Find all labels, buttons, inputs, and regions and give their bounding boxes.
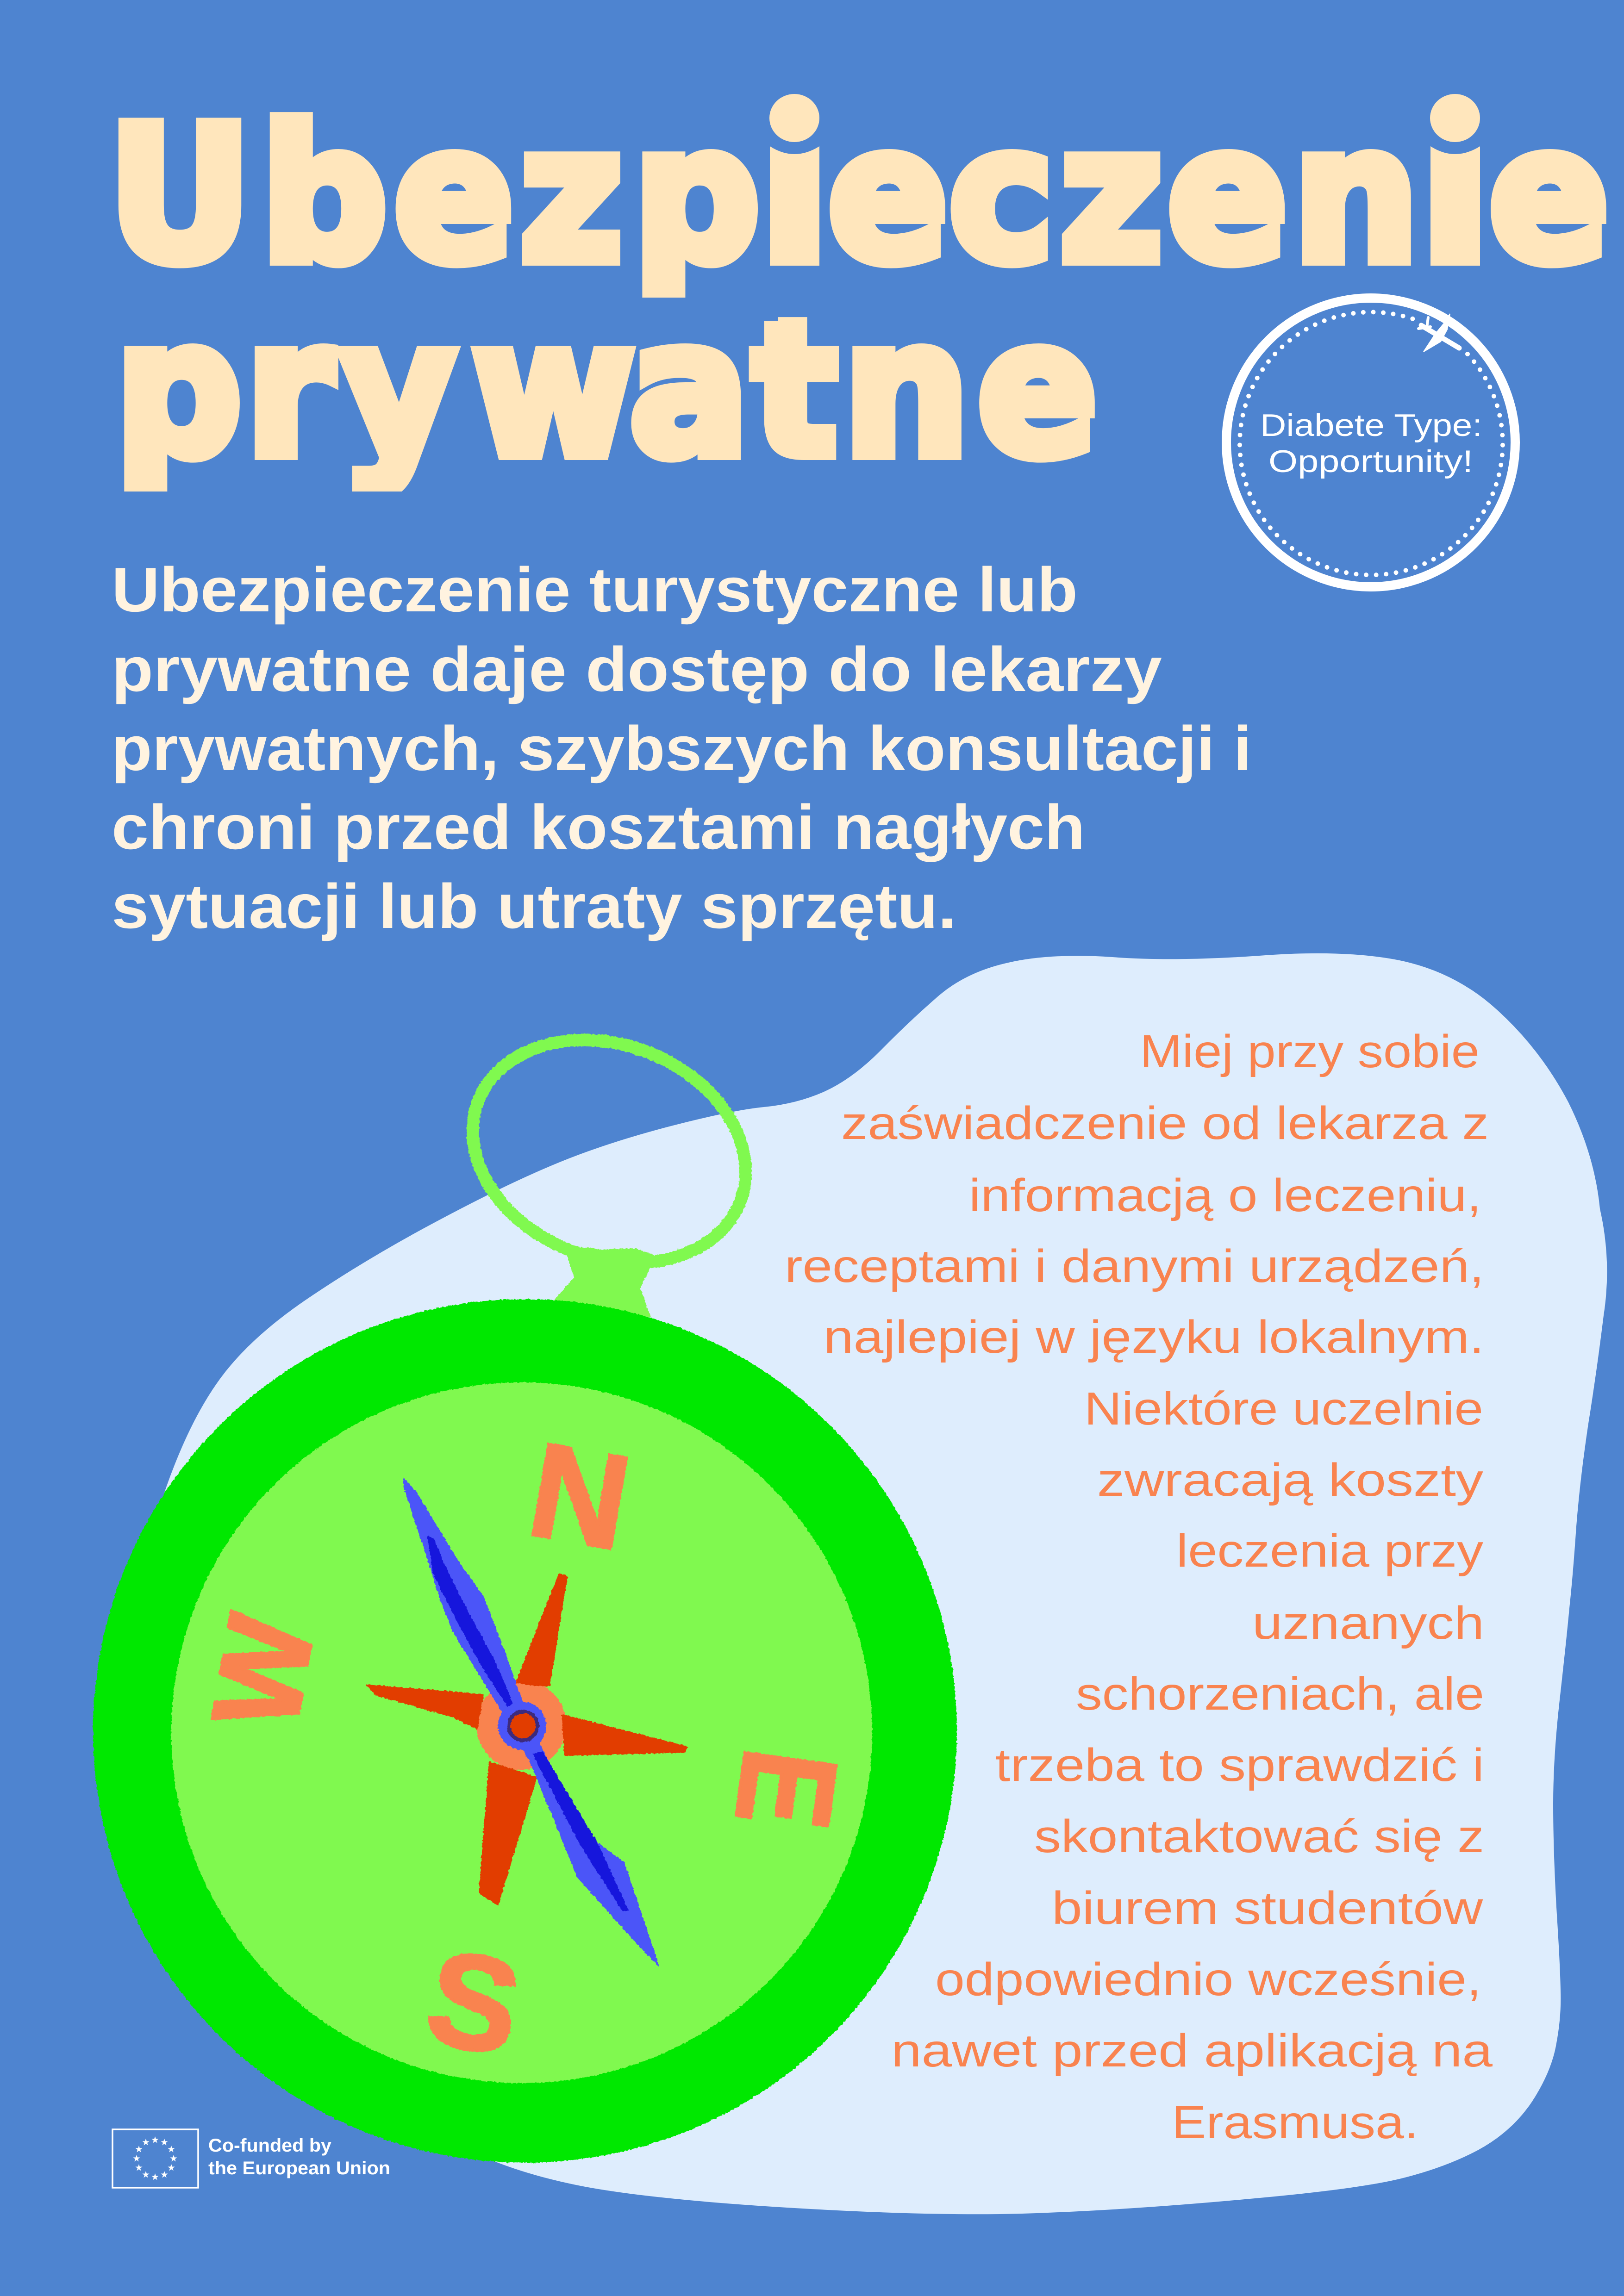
title: Ubezpieczenie	[108, 88, 1609, 303]
EU co-funded logo	[112, 2129, 390, 2188]
panel text: advice: skontaktować się z	[1034, 1811, 1484, 1862]
panel text: advice	[785, 1026, 1493, 2148]
panel text: advice: receptami i danymi urządzeń,	[785, 1240, 1484, 1292]
cardinal letters: S	[417, 1921, 531, 2084]
panel text: advice: informacją o leczeniu,	[969, 1170, 1481, 1221]
panel text: advice: zwracają koszty	[1097, 1454, 1483, 1506]
EU text: the European Union	[208, 2158, 390, 2178]
panel text: advice: najlepiej w języku lokalnym.	[824, 1311, 1484, 1363]
panel text: advice: odpowiednio wcześnie,	[935, 1954, 1481, 2005]
cardinal letters: W	[186, 1605, 340, 1738]
icon: compass	[93, 1002, 957, 2163]
icon: airplane	[1418, 314, 1459, 352]
compass dial	[171, 1382, 872, 2083]
compass outer body	[93, 1299, 957, 2163]
panel text: advice: biurem studentów	[1052, 1882, 1483, 1934]
compass hub	[476, 1680, 566, 1770]
badge: Diabete Type Opportunity	[1226, 298, 1515, 587]
intro text: chroni przed kosztami nagłych	[112, 792, 1085, 862]
intro text	[112, 554, 1252, 941]
badge text: Opportunity!	[1268, 444, 1473, 479]
panel text: advice: trzeba to sprawdzić i	[995, 1739, 1484, 1791]
panel text: advice: Miej przy sobie	[1140, 1026, 1480, 1077]
panel text: advice: Erasmusa.	[1172, 2097, 1418, 2148]
intro text: prywatnych, szybszych konsultacji i	[112, 713, 1252, 784]
cardinal letters: N	[519, 1414, 640, 1579]
intro text: sytuacji lub utraty sprzętu.	[112, 871, 956, 941]
red compass rays	[368, 1574, 687, 1904]
needle pivot	[498, 1702, 546, 1750]
blue compass needle	[403, 1477, 660, 1967]
badge text	[1260, 408, 1482, 479]
cardinal letters	[186, 1414, 866, 2084]
compass ring	[440, 1002, 778, 1301]
compass neck	[554, 1244, 656, 1317]
panel text: advice: Niektóre uczelnie	[1084, 1383, 1483, 1435]
EU text	[208, 2135, 390, 2178]
panel text: advice: uznanych	[1252, 1597, 1484, 1649]
title	[104, 88, 1609, 515]
badge text: Diabete Type:	[1260, 408, 1482, 443]
EU text: Co-funded by	[208, 2135, 332, 2156]
intro text: prywatne daje dostęp do lekarzy	[112, 634, 1162, 704]
title: prywatne	[116, 282, 1097, 498]
EU flag	[112, 2129, 198, 2188]
panel text: advice: schorzeniach, ale	[1076, 1668, 1484, 1720]
intro text: Ubezpieczenie turystyczne lub	[112, 554, 1078, 625]
dark needle stripes	[427, 1536, 629, 1911]
panel: light blue blob	[164, 953, 1607, 2214]
panel text: advice: leczenia przy	[1176, 1525, 1483, 1577]
panel text: advice: nawet przed aplikacją na	[891, 2025, 1493, 2077]
panel text: advice: zaświadczenie od lekarza z	[841, 1097, 1489, 1149]
cardinal letters: E	[707, 1741, 866, 1837]
